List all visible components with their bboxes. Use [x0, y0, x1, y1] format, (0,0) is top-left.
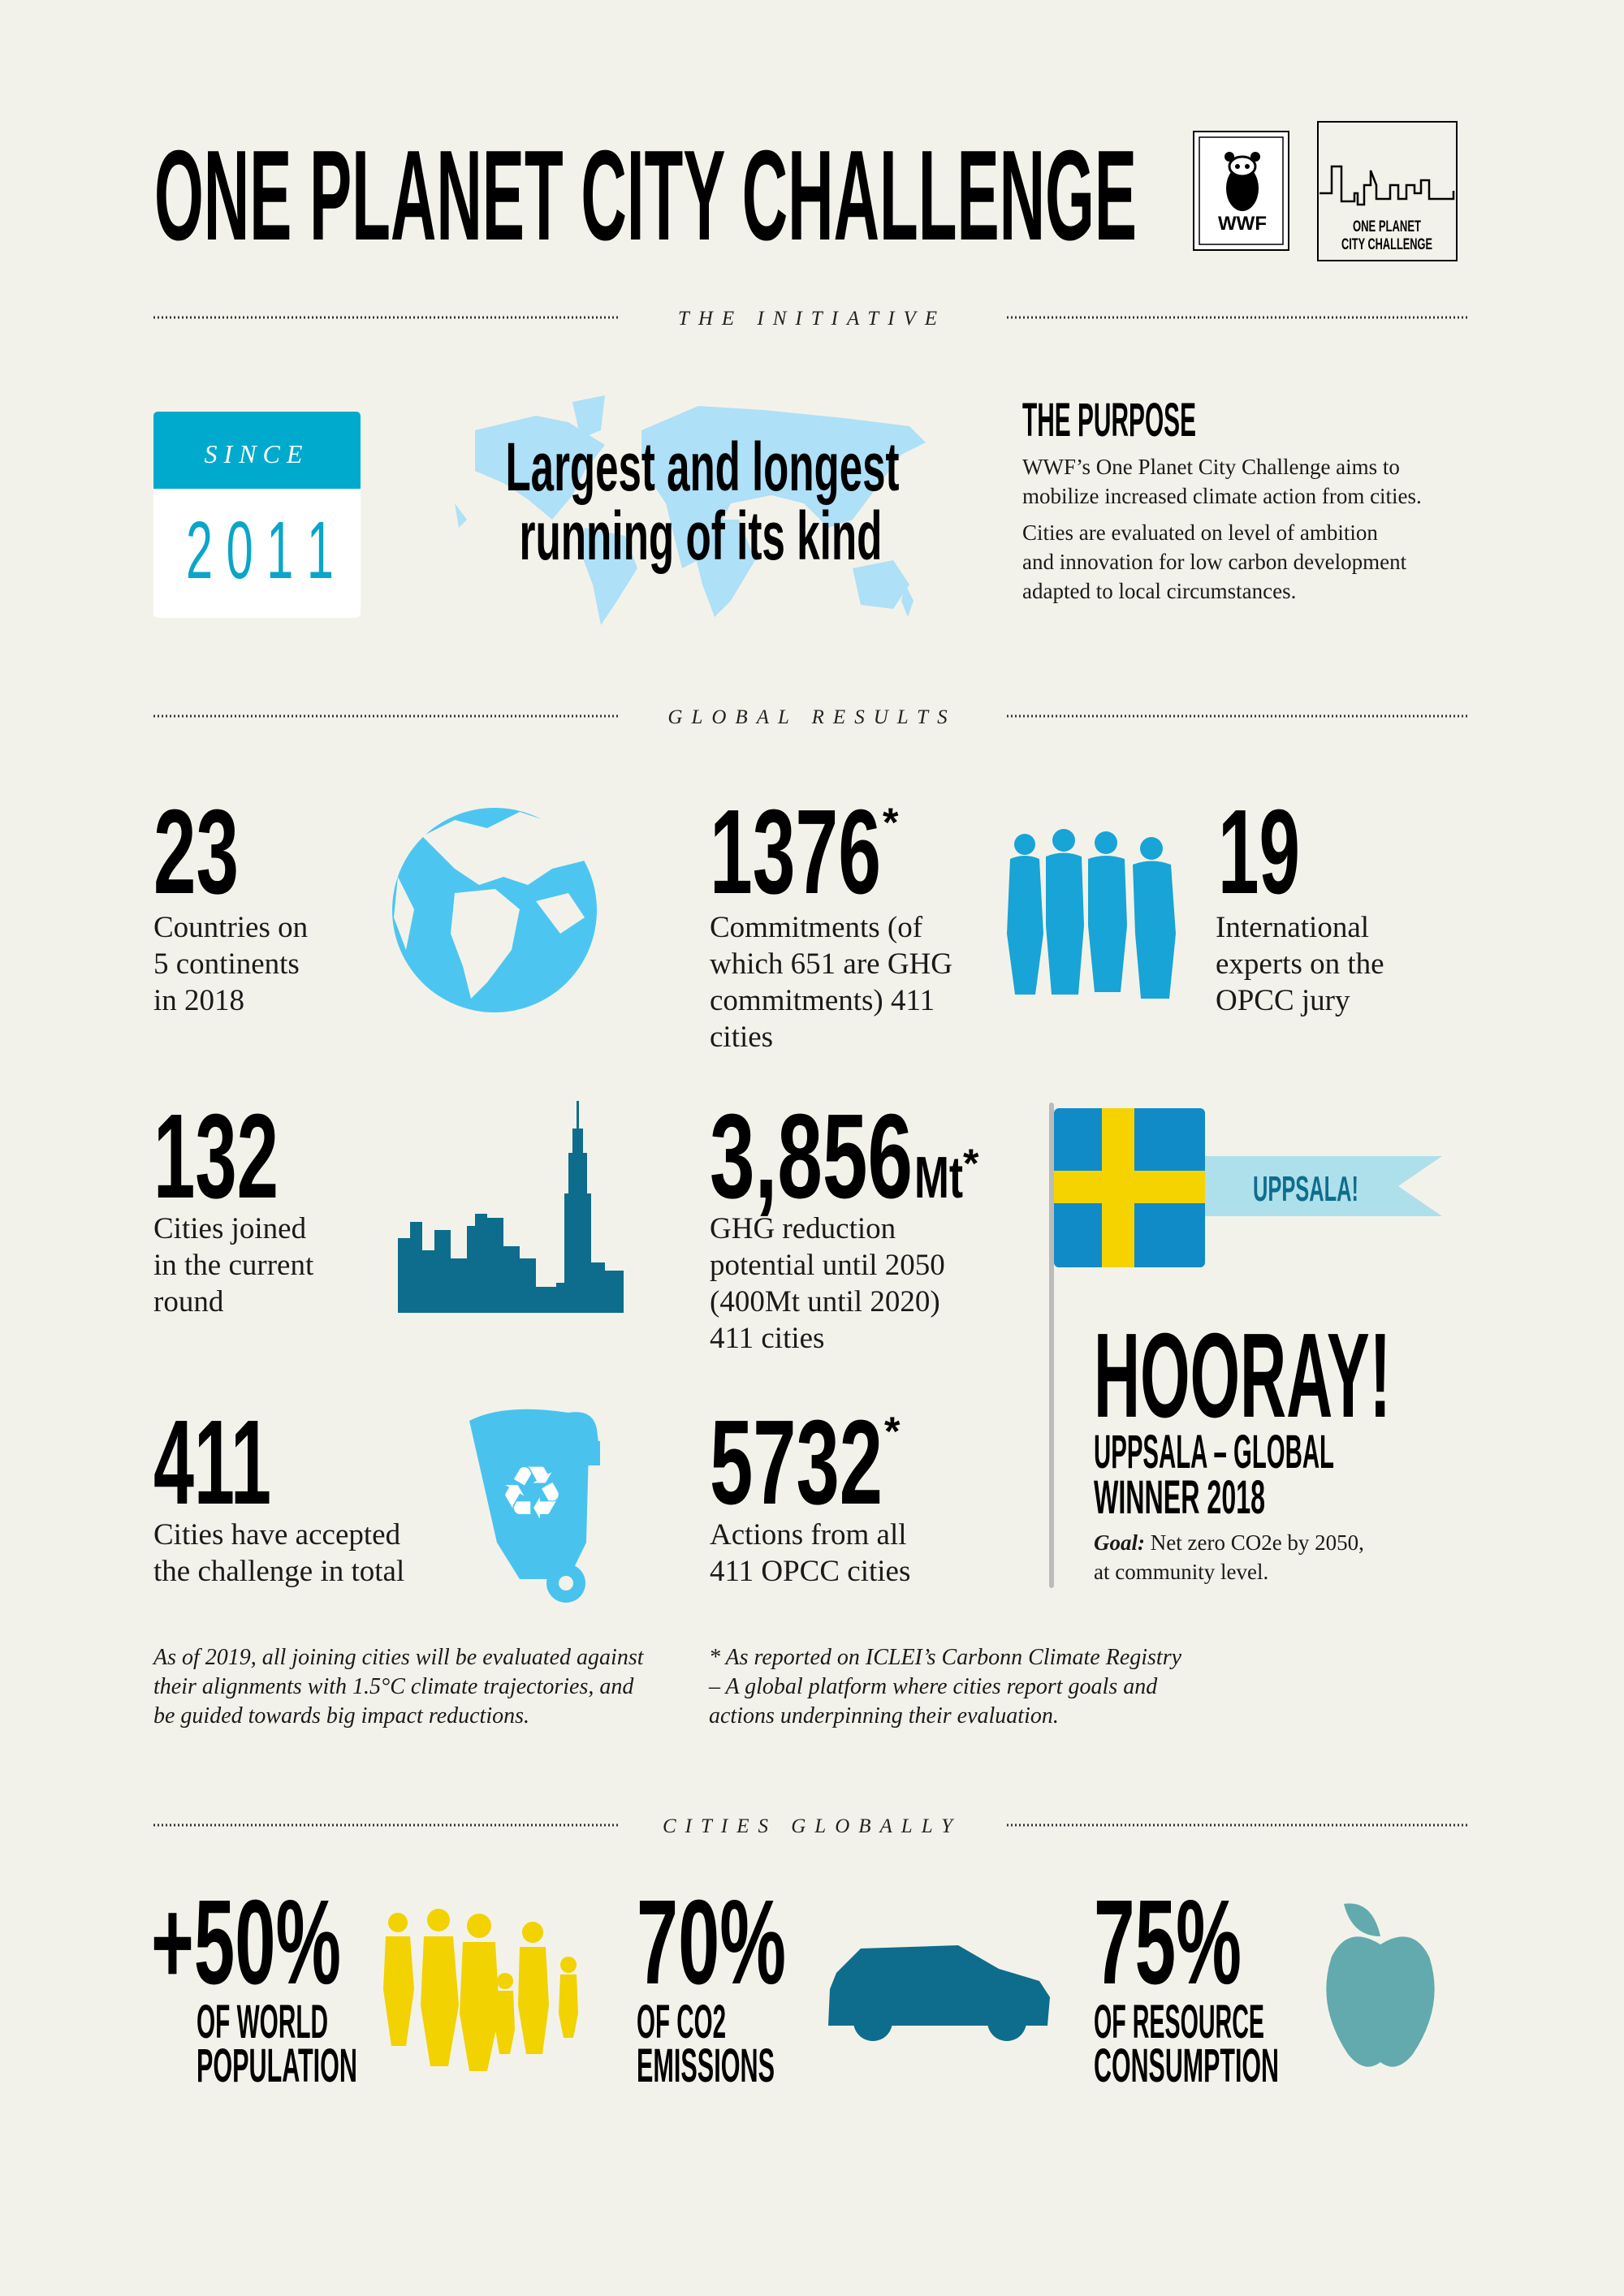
stat: 23 countries: Countries on	[153, 911, 308, 944]
stat: 3,856Mt: GHG reduction	[710, 1212, 896, 1245]
section header: global results: GLOBAL RESULTS	[667, 706, 957, 728]
stat: 75% resource	[1094, 1875, 1279, 2092]
logo: One Planet City Challenge: ONE PLANET	[1353, 218, 1421, 235]
icon: city skyline	[398, 1101, 624, 1313]
footnote: 2019 evaluation	[152, 1645, 645, 1728]
the purpose: Cities are evaluated on level of ambition	[1022, 520, 1378, 545]
icon: car	[828, 1945, 1050, 2041]
stat: 75% resource: 75%	[1094, 1875, 1242, 2009]
stat: 70% emissions: 70%	[637, 1875, 786, 2009]
stat: 3,856Mt: Mt	[914, 1146, 963, 1211]
stat: 5732 actions	[710, 1396, 910, 1588]
since 2011 card	[153, 412, 361, 618]
stat: 75% resource: CONSUMPTION	[1094, 2039, 1279, 2092]
winner: hooray: Goal: Net zero CO2e by 2050,	[1094, 1530, 1364, 1555]
stat: 23 countries: in 2018	[153, 984, 244, 1017]
logo: One Planet City Challenge	[1318, 122, 1457, 261]
footnote: carbonn registry: actions underpinning their evaluation.	[709, 1703, 1059, 1728]
icon: recycling bin	[469, 1409, 600, 1603]
the purpose: mobilize increased climate action from cities.	[1022, 484, 1422, 508]
world map with slogan	[455, 395, 926, 625]
stat: 3,856Mt: 411 cities	[710, 1322, 824, 1355]
the purpose: THE PURPOSE	[1022, 394, 1196, 447]
footnote: carbonn registry	[708, 1645, 1182, 1728]
stat: 132 cities: 132	[153, 1090, 279, 1224]
icon: yellow crowd	[383, 1909, 578, 2071]
icon: swedish flag with banner: UPPSALA!	[1253, 1169, 1358, 1209]
stat: +50% population: POPULATION	[197, 2039, 357, 2092]
logo: WWF	[1194, 132, 1289, 250]
stat: 5732 actions: *	[884, 1409, 901, 1454]
stat: 132 cities: in the current	[153, 1249, 314, 1282]
section header: cities globally: CITIES GLOBALLY	[663, 1815, 961, 1837]
stat: 19 experts	[1216, 785, 1384, 1017]
stat: 3,856Mt: 3,856	[710, 1090, 913, 1224]
logo: One Planet City Challenge: CITY CHALLENGE	[1341, 236, 1432, 253]
since 2011 card: SINCE	[205, 439, 309, 468]
the purpose: WWF’s One Planet City Challenge aims to	[1022, 455, 1400, 479]
the purpose: adapted to local circumstances.	[1022, 579, 1296, 603]
stat: 1376 commitments: cities	[710, 1021, 773, 1054]
stat: 23 countries: 23	[153, 785, 239, 919]
footnote: 2019 evaluation: their alignments with 1.5°C climate trajectories, and	[153, 1674, 634, 1699]
stat: 1376 commitments: Commitments (of	[710, 911, 923, 944]
icon: recycling bin: ♻	[499, 1451, 564, 1536]
world map with slogan: running of its kind	[520, 498, 882, 574]
stat: 132 cities	[153, 1090, 314, 1318]
icon: group of people	[1007, 829, 1176, 999]
section header: the initiative: THE INITIATIVE	[678, 308, 946, 330]
stat: 19 experts: experts on the	[1216, 947, 1384, 981]
stat: 5732 actions: 411 OPCC cities	[710, 1555, 910, 1588]
winner: hooray	[1094, 1309, 1391, 1584]
stat: 3,856Mt: (400Mt until 2020)	[710, 1285, 940, 1318]
stat: 132 cities: Cities joined	[153, 1212, 307, 1245]
stat: 70% emissions	[637, 1875, 786, 2092]
footnote: carbonn registry: – A global platform where cities report goals and	[708, 1674, 1158, 1699]
icon: apple	[1326, 1903, 1435, 2067]
stat: 23 countries	[153, 785, 308, 1017]
stat: 3,856Mt: potential until 2050	[710, 1249, 945, 1282]
winner: hooray: WINNER 2018	[1094, 1471, 1265, 1524]
stat: 411 cities: the challenge in total	[153, 1555, 404, 1588]
stat: +50% population	[151, 1875, 357, 2092]
footnote: 2019 evaluation: be guided towards big impact reductions.	[153, 1703, 529, 1728]
stat: 3,856Mt	[710, 1090, 979, 1355]
stat: 1376 commitments: 1376	[710, 785, 881, 919]
the purpose	[1022, 394, 1422, 603]
icon: globe	[392, 808, 597, 1012]
stat: 19 experts: International	[1216, 911, 1369, 944]
the purpose: and innovation for low carbon development	[1022, 550, 1407, 574]
stat: 1376 commitments: *	[883, 800, 899, 845]
stat: 1376 commitments: commitments) 411	[710, 984, 935, 1017]
stat: 1376 commitments	[710, 785, 952, 1054]
stat: +50% population: OF WORLD	[197, 1996, 328, 2048]
stat: 411 cities: 411	[153, 1396, 271, 1530]
stat: 3,856Mt: *	[963, 1141, 979, 1186]
icon: swedish flag with banner	[1049, 1103, 1442, 1588]
stat: 5732 actions: Actions from all	[710, 1518, 907, 1552]
footnote: carbonn registry: * As reported on ICLEI’s Carbonn Climate Registry	[709, 1645, 1182, 1670]
winner: hooray: at community level.	[1094, 1560, 1268, 1584]
world map with slogan: Largest and longest	[505, 429, 900, 505]
stat: 132 cities: round	[153, 1285, 224, 1318]
stat: 411 cities	[153, 1396, 404, 1588]
stat: 1376 commitments: which 651 are GHG	[710, 947, 952, 981]
logo: WWF: WWF	[1218, 213, 1267, 235]
stat: 19 experts: 19	[1218, 785, 1300, 919]
since 2011 card: 2 0 1 1	[186, 505, 334, 596]
winner: hooray: UPPSALA – GLOBAL	[1094, 1426, 1334, 1478]
stat: 5732 actions: 5732	[710, 1396, 883, 1530]
stat: 70% emissions: OF CO2	[637, 1996, 726, 2048]
stat: 411 cities: Cities have accepted	[153, 1518, 401, 1552]
footnote: 2019 evaluation: As of 2019, all joining cities will be evaluated against	[152, 1645, 645, 1670]
stat: +50% population: +50%	[151, 1875, 341, 2009]
stat: 70% emissions: EMISSIONS	[637, 2039, 775, 2092]
stat: 23 countries: 5 continents	[153, 947, 300, 981]
stat: 19 experts: OPCC jury	[1216, 984, 1350, 1017]
stat: 75% resource: OF RESOURCE	[1094, 1996, 1264, 2048]
